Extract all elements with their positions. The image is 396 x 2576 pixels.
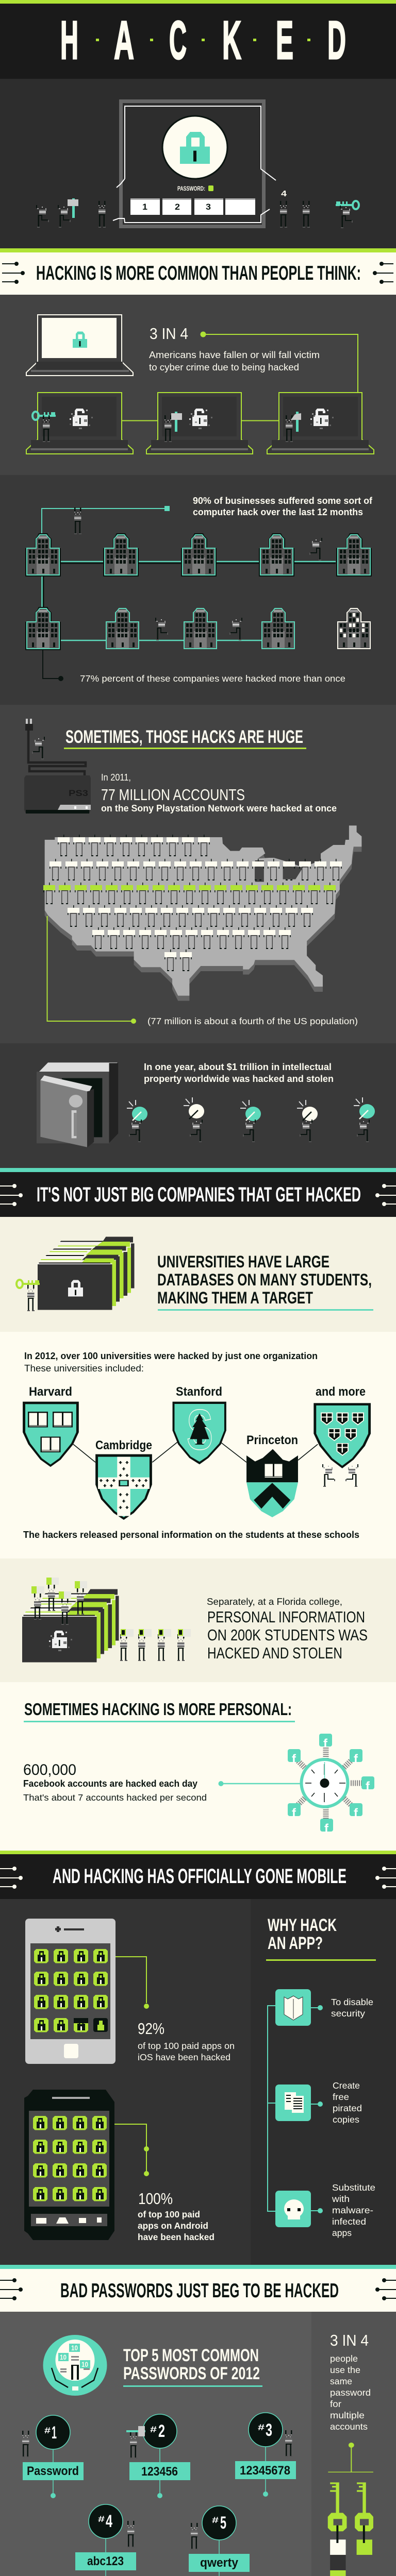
panel: bad passwords heading	[0, 2265, 396, 2312]
stat: same password: accounts	[330, 2421, 368, 2432]
stat text: to cyber crime due to being hacked	[149, 362, 299, 372]
reason: pirated copies: free	[333, 2092, 349, 2102]
Facebook icons: f	[354, 1752, 358, 1766]
shield crests	[23, 1402, 371, 1520]
university labels: Cambridge	[95, 1438, 152, 1452]
password 2	[126, 2414, 190, 2498]
password 4: 4	[106, 2512, 112, 2531]
university labels: and more	[316, 1385, 366, 1399]
reason: malware: with	[332, 2194, 350, 2204]
Facebook icons	[288, 1734, 374, 1836]
password 3: 12345678	[240, 2464, 290, 2478]
keypad: 2	[175, 202, 180, 212]
hackers carrying ideas	[127, 1097, 375, 1142]
Android connector	[114, 2124, 149, 2176]
badge: password hackers: 10	[71, 2344, 78, 2352]
reason: pirated copies: copies	[333, 2114, 359, 2125]
password 3: #	[258, 2422, 265, 2432]
stat 100 percent	[138, 2190, 214, 2242]
stat: same password	[330, 2331, 371, 2432]
password 1	[22, 2415, 84, 2498]
stat 200k students: Separately, at a Florida college,	[207, 1597, 342, 1607]
icon: pirated copies	[275, 2084, 311, 2121]
reason: pirated copies: Create	[333, 2080, 360, 2091]
stat 77 percent: 77% percent of these companies were hacked more than once	[80, 673, 345, 684]
callout connector	[47, 916, 136, 1024]
icon: game console with plug: PS3	[69, 788, 88, 798]
heading: UNIVERSITIES HAVE LARGE	[157, 1252, 329, 1271]
stat text: Americans have fallen or will fall victim	[149, 350, 320, 360]
password 5: 5	[220, 2513, 226, 2533]
panel: hacking is personal	[0, 1682, 396, 1851]
circuit decoration	[0, 1867, 396, 1889]
Facebook icons: f	[354, 1806, 358, 1820]
panel: hero login screen under attack	[0, 79, 396, 248]
stat 90 percent	[193, 496, 373, 517]
Facebook icons: f	[323, 1737, 328, 1751]
heading: SOMETIMES HACKING IS MORE PERSONAL:	[24, 1700, 292, 1719]
password 3	[235, 2413, 296, 2497]
heading underline	[24, 1721, 295, 1722]
reason dots	[318, 2005, 323, 2213]
password 1: #	[44, 2426, 51, 2435]
US map	[45, 825, 361, 1001]
icon: disable security	[275, 1989, 311, 2026]
heading: why hack an app: WHY HACK	[268, 1916, 337, 1935]
Stanford tree	[190, 1413, 209, 1445]
connector to clock	[219, 1781, 302, 1786]
title: K	[222, 10, 241, 71]
Facebook icons: f	[366, 1780, 370, 1793]
badge: password hackers	[43, 2335, 107, 2396]
password label: PASSWORD:	[177, 185, 205, 192]
heading: PASSWORDS OF 2012	[123, 2364, 260, 2383]
stat 92 percent: iOS have been hacked	[138, 2052, 230, 2062]
heading underline	[64, 748, 306, 749]
stat: same password: password	[330, 2387, 371, 2398]
intro text: In 2012, over 100 universities were hacked by just one organization	[24, 1351, 318, 1361]
panel: title banner	[0, 0, 396, 79]
intro text	[24, 1351, 318, 1374]
reason: malware: infected	[332, 2216, 366, 2227]
iPhone connector	[116, 1957, 149, 2009]
icon: malware skull	[275, 2191, 311, 2227]
panel: 3 in 4 Americans	[0, 295, 396, 475]
stat 77 million: on the Sony Playstation Network were hacked at once	[101, 803, 337, 814]
password 5: #	[212, 2515, 219, 2525]
reason: malware: apps	[332, 2228, 352, 2238]
Android phone	[24, 2090, 114, 2240]
iPhone	[25, 1919, 116, 2064]
stat 92 percent	[138, 2020, 235, 2062]
monitor frame	[113, 101, 276, 227]
reason: disable security: security	[331, 2008, 365, 2019]
stat 1 trillion	[144, 1062, 334, 1084]
password 1: Password	[27, 2464, 79, 2478]
panel: title banner: D	[327, 10, 346, 71]
stat 100 percent: apps on Android	[138, 2221, 208, 2231]
Facebook icons: f	[292, 1752, 296, 1766]
icon: folder stack with hacker	[16, 1237, 135, 1311]
Stanford S: S	[187, 1398, 213, 1462]
icon: open safe	[37, 1062, 118, 1147]
circuit decoration	[2, 262, 393, 284]
heading: why hack an app	[268, 1916, 337, 1953]
password 4	[75, 2504, 136, 2576]
stat: same password: use the	[330, 2365, 360, 2375]
stat 1 trillion: property worldwide was hacked and stolen	[144, 1074, 334, 1084]
stat 77 million: 77 MILLION ACCOUNTS	[101, 786, 245, 804]
reason: disable security	[331, 1997, 373, 2019]
panel: hacks are huge	[0, 705, 396, 1043]
stat 200k students: HACKED AND STOLEN	[207, 1644, 342, 1662]
hackers around the clock	[298, 1748, 362, 1819]
clock	[301, 1759, 348, 1807]
flying number 4: 4	[281, 190, 287, 198]
stat: same password: 3 IN 4	[330, 2331, 369, 2349]
password 2: 123456	[141, 2465, 178, 2479]
keypad: 3	[206, 202, 211, 212]
heading underline	[158, 1309, 373, 1311]
stat 3 in 4: 3 IN 4	[150, 325, 188, 343]
university labels: Harvard	[29, 1385, 72, 1399]
hackers carrying a shield	[322, 1464, 358, 1487]
stat: same password: multiple	[330, 2410, 365, 2420]
icon: game console with plug	[24, 719, 91, 814]
panel: gone mobile heading	[0, 1851, 396, 1899]
password 3: 3	[266, 2420, 272, 2440]
stat 100 percent: 100%	[138, 2190, 173, 2208]
lime laptops with hackers	[26, 393, 374, 454]
stat 600,000: Facebook accounts are hacked each day	[23, 1778, 197, 1789]
laptop white	[26, 315, 133, 376]
heading: why hack an app: AN APP?	[268, 1934, 323, 1953]
heading underline	[123, 2385, 262, 2387]
panel: universities databases	[0, 1217, 396, 1332]
stat 600,000	[23, 1761, 207, 1803]
Facebook icons: f	[324, 1822, 329, 1836]
heading	[123, 2346, 260, 2383]
reason: disable security: To disable	[331, 1997, 373, 2007]
callout text: (77 million is about a fourth of the US population)	[147, 1016, 358, 1026]
university labels	[29, 1385, 366, 1452]
panel: universities hacked	[0, 1332, 396, 1558]
stat 92 percent: of top 100 paid apps on	[138, 2041, 235, 2051]
title: A	[114, 10, 134, 71]
password 4: abc123	[87, 2554, 124, 2568]
stat 100 percent: of top 100 paid	[138, 2209, 200, 2219]
university labels: Princeton	[246, 1433, 298, 1447]
hackers stealing student records	[31, 1578, 191, 1661]
people on the map: one fourth of the population	[43, 835, 342, 971]
building rows	[25, 533, 372, 650]
reason: pirated copies	[333, 2080, 362, 2125]
panel: intellectual property stolen	[0, 1043, 396, 1168]
keypad	[130, 198, 255, 215]
stat 90 percent: computer hack over the last 12 months	[193, 507, 363, 517]
panel: top 5 passwords	[0, 2312, 396, 2576]
title: H	[60, 10, 78, 71]
university labels: Stanford	[176, 1385, 222, 1399]
badge: password hackers: 10	[81, 2360, 88, 2368]
intro text: These universities included:	[24, 1363, 144, 1374]
heading: MAKING THEM A TARGET	[157, 1289, 313, 1307]
panel: not just big companies heading	[0, 1168, 396, 1217]
panel: businesses hacked	[0, 475, 396, 705]
Facebook icons: f	[292, 1806, 296, 1820]
hackers on the network	[74, 507, 322, 640]
stat: same password: same	[330, 2376, 352, 2386]
keypad: 1	[142, 202, 147, 212]
reason: malware	[332, 2182, 375, 2238]
connector node	[164, 506, 170, 511]
stat 600,000: That's about 7 accounts hacked per second	[23, 1792, 207, 1803]
reason: pirated copies: pirated	[333, 2103, 362, 2113]
stat 1 trillion: In one year, about $1 trillion in intellectual	[144, 1062, 332, 1072]
panel: mobile apps	[0, 1899, 396, 2265]
stat 90 percent: 90% of businesses suffered some sort of	[193, 496, 373, 506]
closing text: The hackers released personal information on the students at these schools	[23, 1530, 359, 1540]
password 2: #	[150, 2425, 157, 2434]
password 4: #	[98, 2514, 105, 2524]
stat 200k students	[207, 1597, 368, 1662]
heading underline	[266, 1959, 376, 1961]
circuit decoration	[0, 2278, 396, 2300]
stat 100 percent: have been hacked	[138, 2232, 214, 2242]
dark node	[58, 676, 63, 681]
title: C	[169, 10, 187, 71]
stat 77 million: In 2011,	[101, 772, 131, 783]
stat text	[149, 350, 320, 372]
panel: heading more common	[0, 248, 396, 295]
network lines	[42, 509, 336, 679]
password 5	[189, 2506, 250, 2576]
reason: malware: malware-	[332, 2205, 373, 2215]
stat: same password: people	[330, 2353, 358, 2364]
stat connector	[200, 332, 358, 392]
heading	[157, 1252, 372, 1307]
circuit decoration	[0, 1184, 396, 1206]
title separator dots	[96, 39, 310, 41]
badge: password hackers: 10	[60, 2353, 67, 2361]
padlock badge	[162, 116, 227, 179]
icon: keys with tags	[328, 2443, 373, 2576]
stat 92 percent: 92%	[138, 2020, 164, 2038]
stat 77 million	[101, 772, 337, 814]
password 5: qwerty	[200, 2556, 239, 2570]
icon: hacked folder stack	[22, 1589, 119, 1663]
reason connectors	[268, 2006, 320, 2211]
title: E	[276, 10, 293, 71]
title	[60, 10, 346, 71]
password 1: 1	[52, 2423, 57, 2443]
hackers attacking the screen	[36, 198, 359, 228]
stat: same password: for	[330, 2399, 341, 2409]
panel: Florida college	[0, 1558, 396, 1682]
heading: TOP 5 MOST COMMON	[123, 2346, 259, 2365]
password 2: 2	[158, 2421, 165, 2441]
stat 600,000: 600,000	[23, 1761, 76, 1778]
reason: malware: Substitute	[332, 2182, 375, 2193]
